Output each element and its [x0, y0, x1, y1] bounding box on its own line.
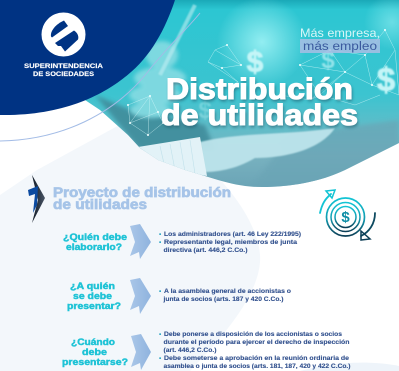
answer: Los administradores (art. 46 Ley 222/1995) — [164, 231, 301, 238]
question — [67, 281, 121, 311]
slogan — [300, 26, 380, 53]
answer — [159, 331, 350, 370]
slogan: más empleo — [303, 41, 377, 53]
section heading — [53, 184, 231, 212]
photo: stylus — [160, 5, 195, 75]
answer: asamblea o junta de socios (arts. 181, 187, 420 y 422 C.Co.) — [164, 363, 350, 370]
main title: Distribución — [167, 75, 354, 108]
logo — [24, 12, 103, 78]
answer: Debe ponerse a disposición de los accionistas o socios — [164, 331, 342, 338]
section heading: Proyecto de distribución — [53, 184, 231, 200]
answer: durante el período para ejercer el derecho de inspección — [164, 339, 350, 346]
section number badge — [28, 175, 45, 223]
answer: (art. 446,2 C.Co.) — [164, 347, 216, 354]
glow spots — [217, 0, 399, 87]
logo emblem — [42, 12, 86, 56]
question — [62, 337, 128, 367]
decorative arc line — [0, 13, 200, 141]
network lines — [128, 30, 399, 135]
dollar signs: $ — [377, 61, 395, 98]
main title — [161, 73, 359, 134]
hero photo — [80, 0, 399, 190]
icon: money cycle: $ — [341, 209, 350, 226]
logo wordmark: SUPERINTENDENCIA — [24, 63, 103, 70]
question: presentarse? — [62, 357, 128, 367]
answer: Debe someterse a aprobación en la reunión ordinaria de — [164, 355, 349, 362]
dollar signs: $ — [321, 47, 335, 74]
logo wordmark — [24, 63, 103, 78]
main title: Distribución — [166, 73, 353, 106]
question: se debe — [73, 291, 112, 301]
answer: junta de socios (arts. 187 y 420 C.Co.) — [162, 296, 284, 303]
answer — [159, 231, 301, 254]
section heading: de utilidades — [53, 196, 147, 212]
answer: Representante legal, miembros de junta — [164, 239, 297, 246]
icon: money cycle — [320, 190, 375, 240]
answer: ▪ — [159, 240, 161, 246]
photo: shirt cuff — [138, 137, 207, 176]
answer: ▪ — [159, 232, 161, 238]
navy header shape — [0, 0, 175, 115]
question: elaborarlo? — [66, 242, 122, 252]
answer: ▪ — [159, 289, 161, 295]
dollar signs: $ — [198, 97, 212, 124]
answer: ▪ — [159, 332, 161, 338]
question: ¿Cuándo — [71, 337, 116, 347]
answer: A la asamblea general de accionistas o — [164, 288, 291, 295]
main title: de utilidades — [161, 99, 358, 132]
question: debe — [82, 347, 107, 357]
question — [63, 232, 127, 252]
photo: upper hand — [129, 41, 186, 118]
question: presentar? — [67, 301, 121, 311]
dollar signs: $ — [247, 46, 264, 79]
logo wordmark: DE SOCIEDADES — [33, 71, 95, 78]
question: ¿A quién — [70, 281, 115, 291]
answer: directiva (art. 446,2 C.Co.) — [164, 247, 248, 254]
arrow — [131, 334, 151, 370]
photo: dark band behind network — [95, 95, 215, 150]
light background blob — [0, 123, 260, 371]
answer: ▪ — [159, 356, 161, 362]
question: ¿Quién debe — [63, 232, 127, 242]
network nodes — [127, 29, 386, 136]
arrow — [130, 278, 151, 314]
photo: lower hand — [200, 128, 335, 172]
dollar signs — [198, 46, 395, 124]
answer — [159, 288, 291, 303]
slogan: Más empresa, — [300, 26, 380, 40]
arrow — [130, 224, 151, 259]
light corner blob — [300, 363, 399, 371]
row 1: who prepares — [63, 224, 301, 259]
row 2: presented to whom — [67, 278, 291, 314]
main title: de utilidades — [162, 101, 359, 134]
row 3: when to present — [62, 331, 350, 370]
